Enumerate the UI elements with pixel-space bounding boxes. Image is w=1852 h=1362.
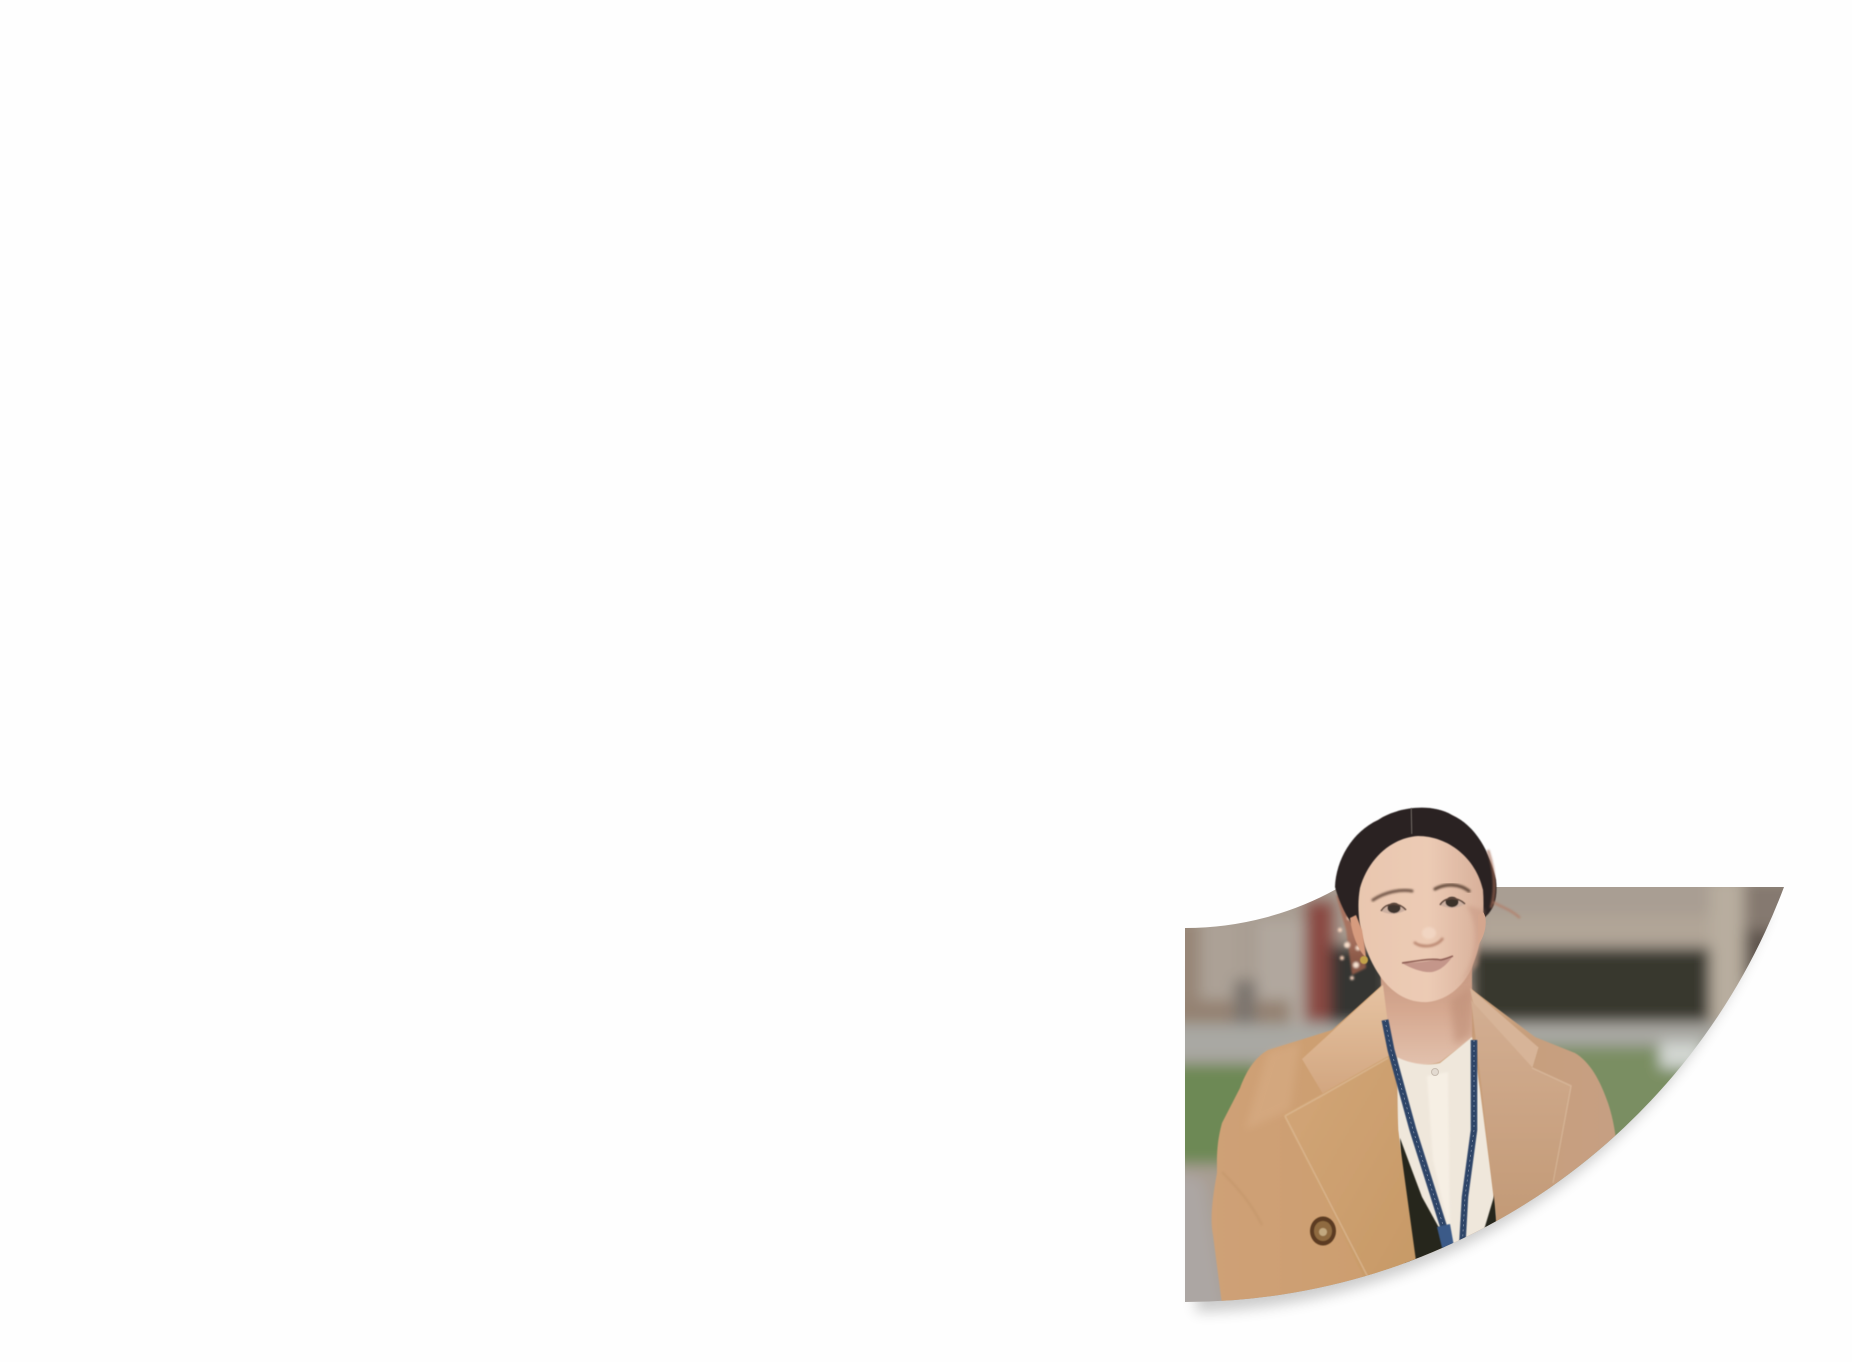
sunlit hair wisps left: [1336, 895, 1366, 980]
neck shadow right: [1450, 985, 1472, 1045]
coat button: [1310, 1216, 1336, 1246]
blurred background: [1185, 887, 1784, 1302]
right lapel: [1472, 1002, 1560, 1221]
lanyard right strap: [1462, 1040, 1474, 1250]
woman's head: [1335, 808, 1520, 1002]
lanyard left stitching: [1385, 1020, 1444, 1228]
left lapel: [1336, 1056, 1416, 1276]
earring: [1360, 956, 1368, 964]
neck: [1380, 960, 1472, 1065]
lapel highlight line: [1285, 1058, 1388, 1285]
coat sleeve seam: [1222, 1172, 1262, 1225]
dark inner top left: [1400, 1138, 1445, 1264]
lanyard tab: [1436, 1223, 1454, 1248]
right lapel edge: [1532, 1047, 1571, 1183]
photo panel: [1185, 887, 1784, 1302]
lanyard left strap: [1385, 1020, 1444, 1228]
left eye: [1381, 903, 1406, 914]
right ear: [1478, 912, 1486, 945]
shirt: [1397, 1037, 1496, 1262]
nose: [1414, 927, 1443, 946]
shirt placket: [1429, 1074, 1448, 1217]
portrait illustration: [1185, 806, 1784, 1318]
mouth: [1402, 956, 1453, 972]
lanyard right stitching: [1462, 1040, 1474, 1250]
face: [1358, 836, 1484, 1002]
collar left: [1302, 985, 1392, 1094]
hair: [1335, 808, 1496, 932]
hair stray right: [1493, 902, 1520, 918]
placket button: [1432, 1068, 1438, 1076]
chin and cheek shading: [1458, 905, 1484, 985]
drop shadow under photo: [1196, 907, 1770, 1312]
right eye: [1440, 897, 1465, 908]
hair sunlit edge right: [1488, 850, 1494, 908]
collar right: [1470, 988, 1538, 1067]
hair part highlight: [1411, 808, 1412, 834]
left eyebrow: [1373, 890, 1412, 900]
coat light on shoulder: [1254, 1048, 1295, 1120]
coat body: [1211, 985, 1616, 1301]
left ear: [1350, 915, 1366, 958]
right eyebrow: [1435, 885, 1469, 891]
dark inner top right: [1484, 1194, 1497, 1228]
